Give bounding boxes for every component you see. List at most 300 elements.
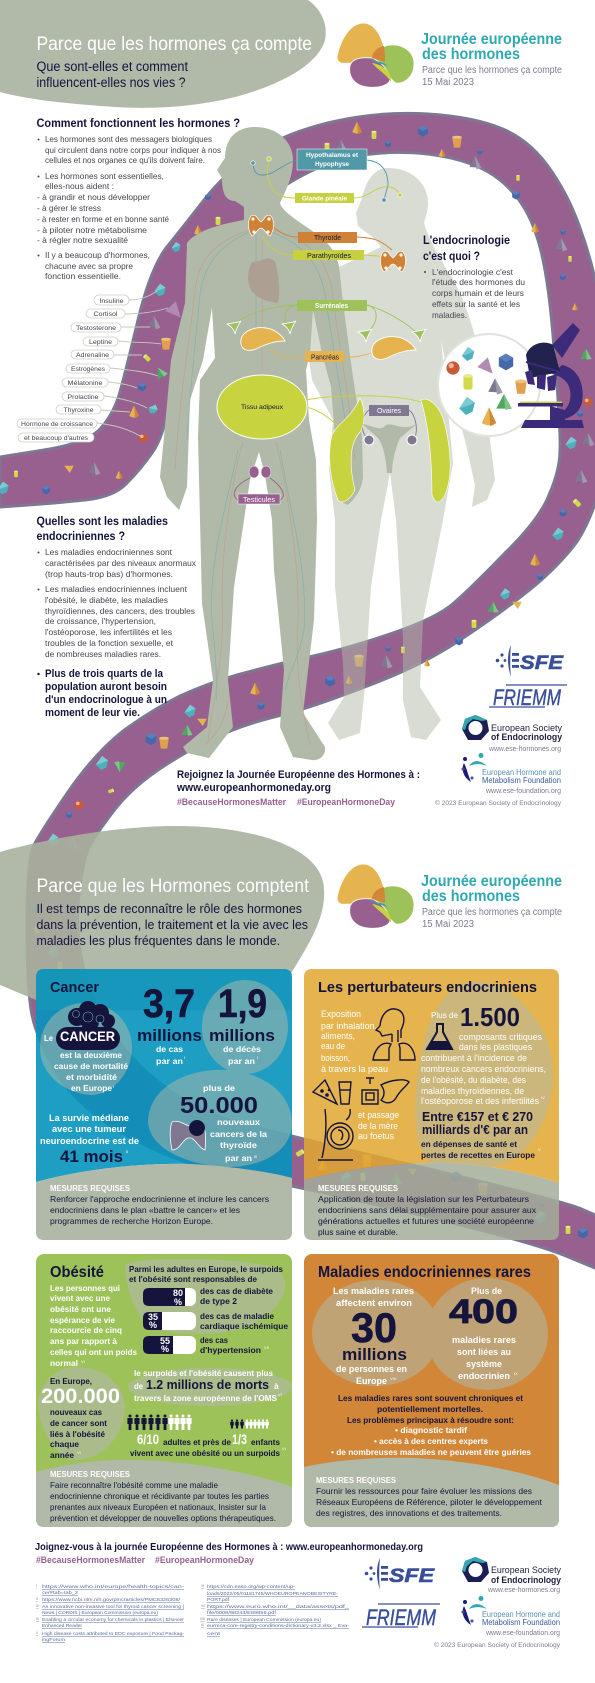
logo: European Hormone and Metabolism Foundation: Metabolism Foundation [482, 776, 561, 785]
chart: percentage bars: % [161, 1344, 169, 1354]
stat: 3,7 millions: millions [137, 1027, 202, 1045]
panel: cancer [36, 969, 292, 1240]
mesures requises: perturbateurs: plus saine et durable. [318, 1228, 398, 1237]
text block: maladies endocriniennes: l'ostéoporose, les infertilités et les [45, 627, 172, 637]
stat: 30 millions: Europe [356, 1376, 387, 1386]
text block: maladies endocriniennes [36, 514, 197, 719]
icon: flask [427, 1024, 452, 1049]
hormone ribbon [0, 113, 595, 1270]
mesures requises: cancer: Renforcer l'approche endocrinienne et inclure les cancers [50, 1195, 269, 1204]
hormone pills with connector lines: Leptine [89, 339, 112, 346]
organ: thyroid male [248, 215, 274, 236]
stat: 50.000: nouveaux [217, 1117, 260, 1127]
text block: maladies endocriniennes: (trop hauts-trop bas) d'hormones. [45, 569, 173, 579]
stat: 1.500: maladies thyroïdiennes, de [421, 1086, 524, 1096]
stat: 400: endocrinien [458, 1371, 510, 1381]
stat: 1.500: contribuent à l'incidence de [421, 1053, 527, 1063]
text block: endocrinologie: corps humain et de leurs [432, 288, 524, 298]
text block: endocrinologie: l'étude des hormones du [432, 277, 525, 287]
text block: comment fonctionnent les hormones: fonction essentielle. [45, 271, 121, 281]
stat: 30 millions: de personnes en [336, 1364, 407, 1374]
stat: 1.500: l'ostéoporose et des infertilités [421, 1096, 540, 1106]
mesures requises: maladies rares [316, 1476, 543, 1518]
connector lines [234, 160, 421, 500]
label: testicules: Testicules [243, 497, 276, 504]
text: esperance de vie: ans par rapport à [50, 1336, 117, 1346]
mesures requises: obesite [50, 1470, 276, 1523]
references: VII [201, 1604, 205, 1608]
text block: maladies endocriniennes: de croissance, l'hypertension, [45, 616, 156, 626]
label: ovaires: Ovaires [377, 408, 401, 415]
stat: 6/10 and 1/3: adultes et près de [163, 1437, 231, 1447]
text: parmi les adultes: et l'obésité sont responsables de [129, 1274, 257, 1284]
stat: 1.500: nombreux cancers endocriniens, [421, 1064, 546, 1074]
heading: perturbateurs: Les perturbateurs endocriniens [318, 980, 537, 996]
hormone pills with connector lines: Hormone de croissance [21, 421, 93, 428]
text block: maladies endocriniennes: population auront besoin [45, 681, 167, 693]
icon: adults pictogram [127, 1414, 192, 1430]
text block: endocrinologie: effets sur la santé et les [432, 299, 520, 309]
mesures requises: maladies rares: Fournir les ressources pour faire évoluer les missions des [316, 1487, 532, 1496]
text block: maladies endocriniennes: endocriniennes ? [36, 529, 125, 543]
stat: 1,9 millions: par an [228, 1056, 255, 1066]
text block: maladies endocriniennes: caractérisées par des niveaux anormaux [45, 558, 197, 568]
stat: 3,7 millions [137, 982, 202, 1066]
second logo text: 15 Mai 2023 [422, 919, 474, 930]
stat: 30 millions [333, 1286, 414, 1386]
text block: maladies endocriniennes: troubles de la fonction sexuelle, et [45, 638, 174, 648]
hormone pills with connector lines [17, 291, 168, 442]
text block: maladies endocriniennes: thyroïdiennes, des cancers, des troubles [45, 606, 195, 616]
text: passage: de la mère [358, 1121, 398, 1131]
mesures requises: maladies rares: des registres, des innovations et des traitements. [316, 1509, 502, 1518]
hormone pills with connector lines: Prolactine [68, 394, 99, 401]
logo: European Society of Endocrinology: European Society [491, 723, 562, 734]
text: passage: au foetus [358, 1131, 395, 1141]
text block: comment fonctionnent les hormones [36, 116, 240, 281]
organ tips: hypothalamus and pineal markers [251, 157, 402, 202]
text: exposition [321, 1009, 388, 1074]
footer logo: European Society of Endocrinology: of Endocrinology [491, 1575, 562, 1586]
stat: 1.2 millions: 1.2 millions de morts [146, 1377, 269, 1392]
organ: heart [248, 258, 279, 303]
text block: maladies endocriniennes: Plus de trois quarts de la [45, 668, 164, 680]
male body silhouette [160, 127, 363, 760]
second logo text: des hormones [422, 888, 520, 905]
stat: 1.2 millions: le surpoids et l'obésité causent plus [134, 1368, 273, 1378]
reference marks: obesite: VI [278, 1392, 282, 1397]
stat: 1.2 millions [134, 1368, 279, 1403]
stat: 1,9 millions: de décès [223, 1044, 261, 1054]
heading: maladies rares: Maladies endocriniennes rares [318, 1264, 531, 1281]
logo: ESFE [496, 645, 565, 677]
blob [415, 981, 553, 1170]
text: esperance de vie: normal [50, 1358, 78, 1368]
references: https://cdn.easo.org/wp-content/up- [207, 1584, 295, 1590]
hormone pills with connector lines: Thyroxine [64, 407, 94, 414]
references: High disease costs attributed to EDC exposure | Food Packag- [42, 1631, 184, 1637]
text: chroniques: potentiellement mortelles. [377, 1404, 483, 1414]
mesures hill [36, 1460, 292, 1527]
stat: 1,9 millions: 1,9 [218, 982, 267, 1026]
references: IV [36, 1617, 40, 1621]
mesures requises: perturbateurs: endocriniens sans délai supplémentaire pour assurer aux [318, 1206, 536, 1215]
text block: comment fonctionnent les hormones: - à gérer le stress [37, 203, 101, 213]
stat: cost: Entre €157 et € 270 [422, 1109, 533, 1124]
label: ovaires [369, 405, 409, 416]
text: esperance de vie: obésité ont une [50, 1304, 111, 1314]
text block: maladies endocriniennes: de nombreuses maladies rares. [45, 649, 161, 659]
text block: endocrinologie: L'endocrinologie [423, 233, 510, 247]
reference marks: perturbateurs [538, 1095, 545, 1152]
mesures requises: maladies rares: Réseaux Européens de Référence, piloter le développement [316, 1498, 543, 1507]
mesures requises: obesite: Faire reconnaître l'obésité comme une maladie [50, 1481, 218, 1490]
logo text: 15 Mai 2023 [422, 77, 474, 88]
second title: dans la prévention, le traitement et la vie avec les [36, 917, 308, 932]
stat: 1.500: dans les plastiques [459, 1042, 533, 1052]
magnifier circle with crystals [438, 334, 540, 436]
text block: endocrinologie: maladies. [432, 310, 467, 320]
text: bar labels: cardiaque ischémique [200, 1321, 288, 1331]
hormone pills with connector lines: Cortisol [94, 311, 118, 318]
organ: pancreas male [241, 328, 285, 350]
reference marks: obesite: VI [81, 1359, 85, 1364]
footer call to action [35, 1542, 423, 1566]
references: eurreca-core-registry-conditions-dictionary-v3.2.xlsx _ Eva- [207, 1623, 349, 1629]
logo: European Hormone and Metabolism Foundation: European Hormone and [482, 768, 561, 777]
text: esperance de vie: celles qui ont un poids [50, 1347, 137, 1357]
label: surrenales: Surrénales [315, 303, 348, 310]
footer logo: European Hormone and Metabolism Foundation [434, 1596, 561, 1649]
label: thyroide [298, 232, 357, 243]
text: chroniques: • diagnostic tardif [395, 1425, 467, 1435]
references: III [36, 1604, 39, 1608]
footer logo: European Society of Endocrinology [462, 1557, 562, 1594]
footer logo: FRIEMM: FRIEMM [366, 1605, 437, 1630]
icon: thyroid with tumour [170, 1120, 206, 1150]
stat: 400: système [466, 1359, 502, 1369]
references: https://www.ncbi.nlm.nih.gov/pmc/articles/PMC6326308/ [42, 1597, 181, 1603]
references: cent [207, 1631, 221, 1637]
logo text: Journée européenne [421, 31, 562, 48]
references: Rare diseases | European Commission (europa.eu) [207, 1617, 321, 1623]
text block: comment fonctionnent les hormones: chacune avec sa propre [45, 261, 133, 271]
reference marks: maladies rares: IX [514, 1371, 518, 1376]
logo: ESFE: SFE [520, 653, 565, 674]
text block: comment fonctionnent les hormones: - à grandir et nous développer [37, 192, 150, 202]
text block: endocrinologie: L'endocrinologie c'est [432, 267, 514, 277]
icons: food, drink, bottle, hand [313, 1078, 409, 1104]
text: deuxieme cause [44, 1033, 128, 1093]
mesures requises: obesite: prenantes aux niveaux Européen et nationaux, Insister sur la [50, 1503, 266, 1512]
icon: cancer cell [56, 1001, 120, 1050]
text: survie mediane: neuroendocrine est de [40, 1136, 139, 1146]
mesures requises: maladies rares: MESURES REQUISES [316, 1476, 397, 1485]
stat: 1.2 millions: de [134, 1381, 143, 1391]
text: exposition: eau de [321, 1041, 345, 1051]
references: ingForum [42, 1637, 65, 1643]
panel: maladies rares [304, 1254, 559, 1527]
stat: 1.2 millions: à [274, 1381, 279, 1391]
stat: 400: 400 [449, 1293, 518, 1331]
chart: percentage bars: 55 [160, 1336, 170, 1346]
stat: 3,7 millions: de cas [156, 1044, 183, 1054]
reference marks: cancer: III [254, 1154, 257, 1159]
text block: comment fonctionnent les hormones: Les hormones sont des messagers biologiques [45, 134, 212, 144]
logo mark [337, 23, 414, 87]
references: Enabling a circular economy for chemicals in plastics | Elsevier [42, 1617, 184, 1623]
footer logo: European Hormone and Metabolism Foundation: © 2023 European Society of Endocrinology [434, 1641, 561, 1649]
text block: comment fonctionnent les hormones: qui circulent dans notre corps pour indiquer à nos [45, 145, 221, 155]
text block: comment fonctionnent les hormones: elles-nous aident : [45, 181, 114, 191]
label: surrenales [297, 300, 367, 311]
stat: 200.000: chaque [50, 1439, 79, 1449]
logo: European Society of Endocrinology [462, 715, 563, 753]
panel: perturbateurs endocriniens [304, 969, 559, 1240]
references: An innovative non-invasive tool for thyroid cancer screening | [42, 1604, 184, 1610]
text block: comment fonctionnent les hormones: - à rester en forme et en bonne santé [37, 214, 169, 224]
text: exposition: aliments, [321, 1031, 355, 1041]
icon: microscope [518, 323, 584, 428]
blood vessels [175, 228, 355, 745]
mesures requises: perturbateurs: Application de toute la législation sur les Perturbateurs [318, 1195, 529, 1204]
reference marks: perturbateurs: V [538, 1147, 541, 1152]
references: VI [201, 1584, 204, 1588]
mesures hill [304, 1458, 559, 1527]
text: survie mediane: avec une tumeur [52, 1124, 127, 1134]
reference marks: perturbateurs: IV [541, 1095, 545, 1100]
chart: percentage bars: 35 [148, 1312, 158, 1322]
second title: maladies les plus fréquentes dans le monde. [36, 933, 280, 948]
text block: maladies endocriniennes: Les maladies endocriniennes sont [45, 547, 173, 557]
call to action: #EuropeanHormoneDay [297, 797, 396, 808]
stat: 50.000: 50.000 [180, 1092, 258, 1118]
mesures requises: cancer [50, 1184, 269, 1226]
crystals on the ribbon [0, 122, 594, 1239]
text block: maladies endocriniennes: l'obésité, le diabète, les maladies [45, 595, 168, 605]
footer call to action: #BecauseHormonesMatter [36, 1555, 145, 1566]
logo: European Society of Endocrinology: www.ese-hormones.org [488, 746, 561, 753]
second section blob [0, 826, 324, 1010]
stat: 200.000: de cancer sont [50, 1418, 107, 1428]
stat: 1.500: Plus de [431, 1010, 458, 1020]
text: bar labels: des cas de diabète [200, 1286, 273, 1296]
stat: cost: milliards d'€ par an [422, 1122, 528, 1137]
hormone pills with connector lines: et beaucoup d'autres [24, 435, 88, 442]
reference marks: cancer: I [257, 1055, 258, 1060]
reference marks: obesite: VI [77, 1450, 81, 1455]
text: deuxieme cause: cause de mortalité [54, 1061, 128, 1071]
text: deuxieme cause: et morbidité [66, 1072, 117, 1082]
second logo text [421, 873, 562, 930]
stat: 3,7 millions: 3,7 [143, 982, 195, 1026]
stat: 1.500: composants critiques [459, 1032, 543, 1042]
footer logo: European Hormone and Metabolism Foundation: www.ese-foundation.org [485, 1630, 560, 1637]
reference marks: obesite: VI [282, 1446, 286, 1451]
footer logo: European Hormone and Metabolism Foundation: European Hormone and [482, 1610, 560, 1619]
references: VIII [200, 1617, 205, 1621]
stat: 50.000: cancers de la [210, 1129, 267, 1139]
references: https://www.euro.who.int/__data/assets/pdf_ [207, 1604, 349, 1610]
second logo text: Parce que les hormones ça compte [422, 907, 562, 918]
label: pancreas: Pancréas [311, 354, 339, 362]
text: survie mediane [40, 1113, 139, 1166]
second logo text: Journée européenne [421, 873, 562, 890]
text block: comment fonctionnent les hormones: - à piloter notre métabolisme [37, 225, 147, 235]
references: Enhanced Reader [42, 1623, 82, 1629]
mesures requises: cancer: endocriniens dans le plan «battre le cancer» et les [50, 1206, 240, 1215]
hormone pills with connector lines: Mélatonine [68, 380, 103, 387]
text: bar labels [200, 1286, 288, 1355]
references: I [36, 1584, 37, 1588]
call to action [176, 769, 420, 808]
references: News | CORDIS | European Commission (europa.eu) [42, 1610, 158, 1616]
references: loads/2022/05/01181745/WHOEUROPEANOBESITYRE- [207, 1591, 338, 1597]
stat: 6/10 and 1/3: 6/10 [137, 1431, 159, 1447]
text block: comment fonctionnent les hormones: Comment fonctionnent les hormones ? [36, 116, 240, 130]
hormone pills with connector lines: Estrogènes [71, 366, 105, 373]
references [36, 1584, 349, 1643]
text block: maladies endocriniennes: Les maladies endocriniennes incluent [45, 584, 188, 594]
chart: percentage bars: % [149, 1320, 157, 1330]
reference marks: cancer: I [184, 1055, 185, 1060]
text: passage: et passage [358, 1110, 399, 1120]
mesures requises: cancer: programmes de recherche Horizon Europe. [50, 1217, 213, 1226]
text block: comment fonctionnent les hormones: cellules et nos organes ce qu'ils doivent faire. [45, 155, 205, 165]
organ: adrenals [227, 321, 426, 342]
organ: adipose tissue male [217, 375, 307, 439]
logo: European Hormone and Metabolism Foundation [435, 753, 562, 807]
hormone pills with connector lines: Insuline [100, 298, 124, 305]
text: esperance de vie: vivent avec une [50, 1293, 110, 1303]
reference marks: obesite: VII [264, 1345, 269, 1350]
mesures requises: perturbateurs: MESURES REQUISES [318, 1184, 399, 1193]
text: deuxieme cause: en Europe [71, 1083, 112, 1093]
stat: 6/10 and 1/3 [130, 1431, 280, 1458]
stat: 1,9 millions [209, 982, 275, 1066]
label: thyroide: Thyroïde [314, 235, 341, 242]
stat: 400: sont liées au [457, 1347, 511, 1357]
logo text: des hormones [422, 46, 520, 63]
text: esperance de vie: espérance de vie [50, 1315, 115, 1325]
mesures requises: perturbateurs [318, 1184, 536, 1237]
stat: 30 millions: Les maladies rares [333, 1286, 414, 1296]
stat: 50.000: thyroïde [220, 1140, 257, 1150]
text: exposition: à travers la peau [321, 1064, 388, 1074]
references: IX [201, 1623, 205, 1627]
footer call to action: Joignez-vous à la journée Européenne des Hormones à : www.europeanhormoneday.org [35, 1542, 423, 1553]
icon: head and lungs [373, 1009, 415, 1060]
stat: 1,9 millions: millions [209, 1027, 275, 1045]
label: testicules [238, 494, 280, 504]
stat: 50.000: plus de [203, 1083, 235, 1093]
title: Parce que les hormones ça compte [36, 33, 312, 55]
text: chroniques: • de nombreuses maladies ne peuvent être guéries [331, 1447, 531, 1457]
reference marks: cancer: II [126, 1149, 128, 1154]
heading: obesite: Obésité [50, 1264, 104, 1281]
text: chroniques: • accès à des centres experts [374, 1436, 488, 1446]
footer logo: ESFE: SFE [389, 1566, 436, 1587]
stat: 200.000: nouveaux cas [50, 1407, 102, 1417]
text: bar labels: de type 2 [200, 1296, 237, 1306]
panel: obesite [36, 1254, 292, 1527]
text: exposition: boisson, [321, 1053, 350, 1063]
text: chroniques [331, 1393, 531, 1457]
mesures requises: obesite: prévention et développer de nouvelles options thérapeutiques. [50, 1514, 276, 1523]
organ: testicles [249, 466, 271, 478]
stat: 1.500 [421, 1002, 546, 1106]
stat: 6/10 and 1/3: enfants [251, 1437, 280, 1447]
text: parmi les adultes [129, 1264, 283, 1284]
reference marks: obesite [77, 1345, 286, 1455]
stat: cost [421, 1109, 535, 1160]
stat: 6/10 and 1/3: vivent avec une obésité ou un surpoids [130, 1448, 280, 1458]
references: V [36, 1631, 39, 1635]
footer logo: ESFE [365, 1558, 436, 1590]
logo text: Parce que les hormones ça compte [422, 65, 562, 76]
chart: percentage bars: % [174, 1297, 182, 1307]
reference marks: cancer: I [113, 1084, 114, 1089]
references: cer#tab=tab_2 [42, 1590, 78, 1596]
organ: pancreas female [372, 337, 416, 359]
references: PORT.pdf [207, 1597, 230, 1603]
reference marks: cancer [113, 1055, 258, 1159]
text block: comment fonctionnent les hormones: - à régler notre sexualité [37, 235, 128, 245]
stat: 50.000: par an [225, 1153, 252, 1163]
circles [312, 1278, 548, 1390]
reference marks: maladies rares [390, 1371, 518, 1381]
icon: cancer cell: CANCER [60, 1029, 115, 1044]
footer logo: European Society of Endocrinology: www.ese-hormones.org [487, 1587, 560, 1594]
text: chroniques: Les maladies rares sont souvent chroniques et [338, 1393, 523, 1403]
text: bar labels: des cas de maladie [200, 1311, 274, 1321]
text: deuxieme cause: Le [44, 1033, 53, 1043]
stat: 200.000: liés à l'obésité [50, 1429, 105, 1439]
stat: cost: pertes de recettes en Europe [421, 1150, 535, 1160]
text block: maladies endocriniennes: moment de leur vie. [45, 707, 140, 719]
footer logo: European Society of Endocrinology: European Society [491, 1565, 561, 1576]
mesures requises: obesite: MESURES REQUISES [50, 1470, 131, 1479]
text block: comment fonctionnent les hormones: Les hormones sont essentielles, [45, 171, 164, 181]
text: survie mediane: La survie médiane [49, 1113, 129, 1123]
stat: 1.500: de l'obésité, du diabète, des [421, 1075, 527, 1085]
organ: adipose tissue male: Tissu adipeux [241, 404, 284, 411]
organ: thyroid female [380, 251, 406, 272]
text: parmi les adultes: Parmi les adultes en Europe, le surpoids [129, 1264, 283, 1274]
logo: European Hormone and Metabolism Foundation: © 2023 European Society of Endocrinology [435, 799, 562, 807]
title: influencent-elles nos vies ? [36, 75, 186, 90]
logo text [421, 31, 562, 88]
logo: FRIEMM: FRIEMM [493, 685, 562, 710]
call to action: Rejoignez la Journée Européenne des Hormones à : [177, 769, 420, 781]
label: hypothalamus: Hypothalamus et [306, 152, 359, 159]
stat: cost: en dépenses de santé et [421, 1139, 517, 1149]
label: hypothalamus: Hypophyse [315, 161, 349, 168]
label: glande pineale [295, 193, 354, 203]
text block: maladies endocriniennes: Quelles sont les maladies [36, 514, 168, 528]
label: pancreas [305, 351, 344, 362]
stat: 6/10 and 1/3: 1/3 [232, 1431, 247, 1447]
header blob [0, 0, 326, 108]
label: parathyroides: Parathyroïdes [307, 253, 351, 260]
stat: 200.000: année [50, 1450, 74, 1460]
organ: uterus and ovaries [362, 424, 417, 473]
second title: Parce que les Hormones comptent [36, 876, 310, 897]
reference marks: maladies rares: VIII [390, 1376, 396, 1381]
stat: 30 millions: affectent environ [336, 1298, 412, 1308]
references: file/0008/98243/E89858.pdf [207, 1610, 277, 1616]
cancer blobs [40, 980, 292, 1167]
